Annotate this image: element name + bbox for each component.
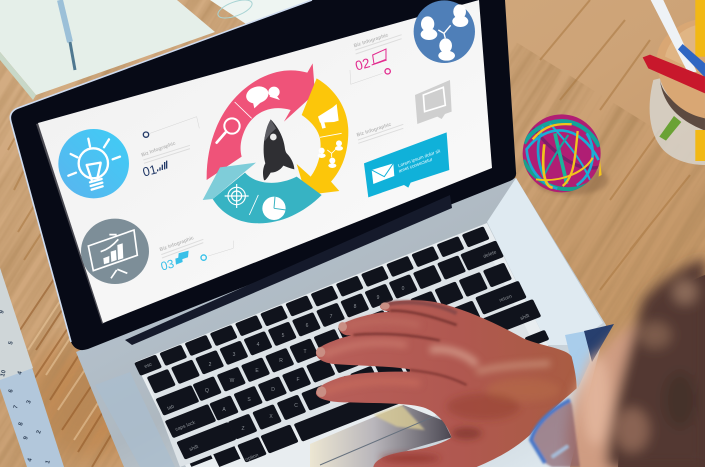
icon: speech bubbles [244,84,280,108]
ruler: 8 [18,421,25,427]
shirt cuff [565,324,614,388]
divider and magnifier [217,102,252,143]
ruler: 6 [8,388,15,394]
blue pencil [678,44,705,77]
icon: grey monitor speech box [415,80,452,124]
ruler: 2 [36,429,43,435]
ruler [0,268,64,467]
key labels: 3 [233,352,236,358]
green pencil [659,116,681,141]
key labels: Z [241,426,245,432]
key labels: D [271,387,275,393]
callout: email message box: Lorem ipsum dolor sit [397,148,441,168]
highlights and shadows [323,321,560,463]
block 01: Biz Infographic [141,141,177,159]
hand silhouette [316,300,577,467]
yellow pencil [695,0,705,161]
laptop base [76,178,606,467]
key labels: A [222,407,226,413]
pencil cup with pencils [643,0,705,165]
key labels: X [269,414,273,420]
arrow: teal [213,173,322,223]
rubber band ball [523,114,608,195]
key labels: 8 [354,304,357,310]
key labels: tab [167,404,175,412]
icon: target [225,184,249,208]
notebook and papers [0,0,340,100]
icon: light bulb circle [58,129,129,198]
number row [147,240,504,394]
keyboard keys [134,222,554,467]
icon: linked people [318,140,343,168]
key labels: S [247,397,251,403]
white pen [651,0,697,73]
icon: rocket [263,119,294,180]
key labels: caps lock [175,420,197,433]
qwerty row [155,262,512,416]
block 03 [159,235,233,274]
fingernails [316,302,390,397]
key labels: 6 [306,323,309,329]
key labels: R [279,358,283,364]
bottom row [190,325,552,467]
arrow: pink [207,63,315,180]
home row [164,281,528,438]
key labels: 4 [257,342,260,348]
block 01 [141,117,199,180]
eyeglasses [531,400,580,467]
arrowhead: light teal [203,163,256,200]
key labels: delete [483,249,498,260]
key labels: T [303,349,307,355]
key labels [144,249,531,463]
block 02 [350,32,402,84]
ruler: 10 [0,369,8,378]
ruler: 5 [8,340,15,346]
red pencil [643,55,705,93]
key labels: 7 [330,314,333,320]
shift row [175,299,543,460]
block 04 text: Biz Infographic [356,122,392,139]
skin and hair underlay [578,330,660,467]
key labels: E [255,368,259,374]
laptop screen [38,0,492,323]
icon: megaphone [318,104,339,129]
ruler: 1 [45,459,52,465]
key labels: esc [144,361,153,370]
block 04 text [356,122,403,143]
block 03: Biz Infographic [159,235,195,253]
ruler: 4 [27,457,34,463]
ruler: 9 [23,435,30,441]
block 02: 02 [354,55,372,74]
key labels: F [296,377,300,383]
key labels: Q [205,388,209,394]
callout: email message box: amet consectetur [398,157,434,174]
arrow: yellow [297,78,348,195]
key labels: shift [189,444,200,453]
pen [60,0,75,70]
finger creases and shading [353,302,467,385]
block 03: 03 [159,256,176,274]
key labels: 2 [209,362,212,368]
hand on keyboard [316,300,577,467]
key labels: return [499,294,513,304]
laptop lid bezel [10,0,516,350]
block 01: 01 [141,162,158,180]
ruler: 7 [13,404,20,410]
key labels: 5 [282,333,285,339]
icon: people network circle [414,0,475,63]
ruler: 4 [17,370,24,376]
ruler: 3 [26,399,33,405]
function row [134,226,490,376]
key labels: shift [520,313,531,322]
key labels: option [245,452,260,463]
key labels: 9 [377,295,380,301]
key labels: C [294,403,298,409]
key labels: 0 [402,286,405,292]
circular arrow diagram [203,63,348,223]
icon: pie chart [262,197,286,220]
block 02: Biz Infographic [353,32,389,49]
icon: presentation board circle [81,219,149,284]
trackpad [310,405,452,467]
key labels: W [230,378,235,384]
callout: email message box [364,132,449,197]
head and hair, out of focus [567,258,705,467]
